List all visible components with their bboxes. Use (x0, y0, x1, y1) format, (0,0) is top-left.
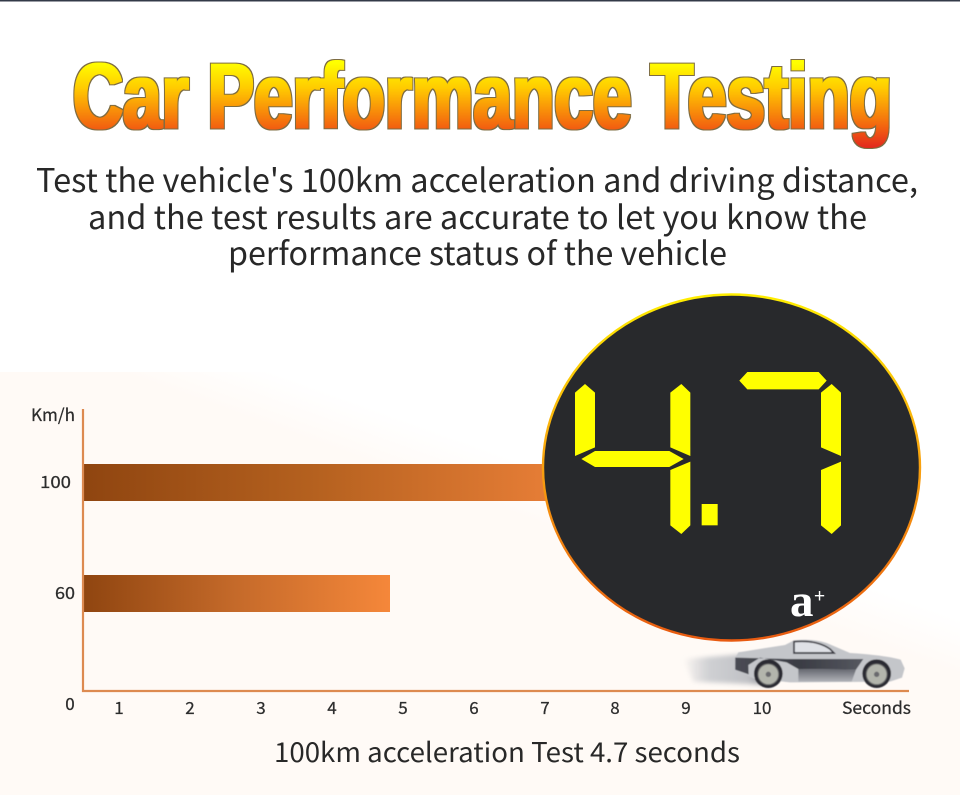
description text (36, 155, 918, 275)
x axis labels: 2 (185, 694, 195, 719)
x axis labels: 8 (610, 694, 620, 719)
x axis labels: 7 (540, 694, 550, 719)
x axis labels: 4 (327, 694, 337, 719)
dark side band (735, 658, 863, 674)
bar chart (31, 401, 911, 719)
digital display circle (543, 294, 920, 640)
reading 4.7 (575, 372, 841, 534)
caption: 100km acceleration Test 4.7 seconds (274, 731, 740, 770)
bar: 60 km/h (83, 575, 390, 612)
chart axes (83, 409, 909, 691)
x axis labels: 9 (681, 694, 691, 719)
car body (735, 640, 905, 688)
x axis labels: 6 (469, 694, 479, 719)
x axis labels: 3 (256, 694, 266, 719)
rear wheel (754, 659, 783, 688)
x axis labels: 1 (114, 694, 124, 719)
lower door panel (798, 669, 856, 682)
lower tinted background (0, 372, 960, 795)
a+ badge: a (790, 575, 814, 627)
x axis labels (65, 690, 911, 719)
bar: 100 km/h (83, 464, 563, 501)
car window (794, 641, 834, 653)
y axis labels: 100 (40, 468, 71, 493)
a+ badge (790, 575, 825, 627)
x axis labels: 0 (65, 690, 75, 715)
description text: performance status of the vehicle (228, 228, 727, 275)
front wheel (862, 659, 891, 688)
y axis labels: 60 (55, 579, 75, 604)
display disc (543, 294, 920, 640)
x axis labels: 10 (753, 694, 771, 719)
description text: and the test results are accurate to let you know the (88, 192, 867, 239)
y axis labels (31, 401, 75, 604)
x axis labels: Seconds (842, 694, 911, 719)
icon: car (683, 640, 905, 688)
motion blur (683, 654, 770, 685)
description text: Test the vehicle's 100km acceleration and driving distance, (36, 155, 918, 202)
y axis labels: Km/h (31, 401, 75, 426)
x axis labels: 5 (398, 694, 408, 719)
top edge strip (0, 0, 960, 2)
a+ badge: + (814, 586, 825, 607)
